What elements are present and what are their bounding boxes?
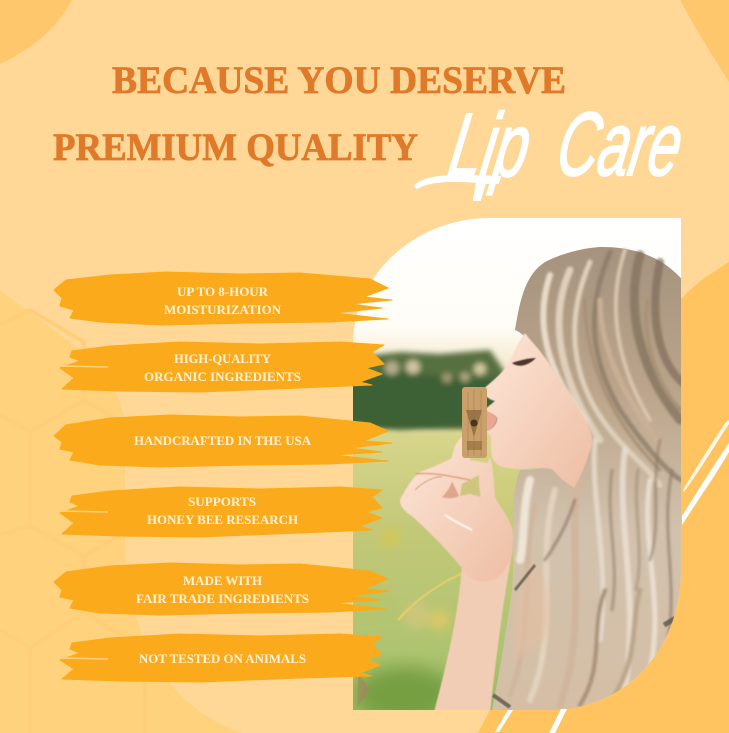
brush label 2: ORGANIC INGREDIENTS [144,370,301,384]
brush label 5: MADE WITH [183,574,262,588]
chest skin [517,570,548,655]
brush label 4: SUPPORTS [188,495,256,509]
hair [490,247,690,720]
clothing stripes [493,565,676,707]
brush label 2 [60,342,384,392]
tree line [345,350,505,435]
brush label 1 [54,272,392,325]
script title: Lip Care [415,95,690,200]
script title: Lip Care: Lip [443,96,538,196]
brush label 1: MOISTURIZATION [164,303,281,317]
brush label 6 [60,634,382,682]
face and neck [482,333,592,488]
brush label 1: UP TO 8-HOUR [177,285,269,299]
finger creases [416,473,470,480]
white brush streaks [495,420,729,733]
lips [487,410,498,431]
brush label 4: HONEY BEE RESEARCH [147,513,298,527]
dark flower lower left [358,676,370,706]
finger gap showing meadow [460,475,481,497]
title: PREMIUM QUALITY [53,126,418,169]
title [53,59,566,169]
brush label 5: FAIR TRADE INGREDIENTS [136,592,309,606]
script swash [415,176,500,200]
brush label 3 [54,415,392,467]
background corner shapes [0,0,729,82]
photo: woman kissing lip balm in meadow [340,218,690,723]
eye [512,358,536,366]
meadow [340,430,580,720]
brush label 4 [60,487,382,537]
grass blade [397,572,462,621]
forearm [434,548,513,712]
brush label 6: NOT TESTED ON ANIMALS [139,652,306,666]
hair strands [510,250,685,705]
hand and forearm [400,436,513,712]
brush label 5 [54,563,390,615]
brush label 2: HIGH-QUALITY [174,352,271,366]
brush label 3: HANDCRAFTED IN THE USA [134,434,311,448]
title: BECAUSE YOU DESERVE [112,59,566,102]
right orange band [478,262,729,733]
lip balm stick [462,387,487,458]
honeycomb pattern panel [0,290,242,733]
palm and fingers [400,436,513,582]
